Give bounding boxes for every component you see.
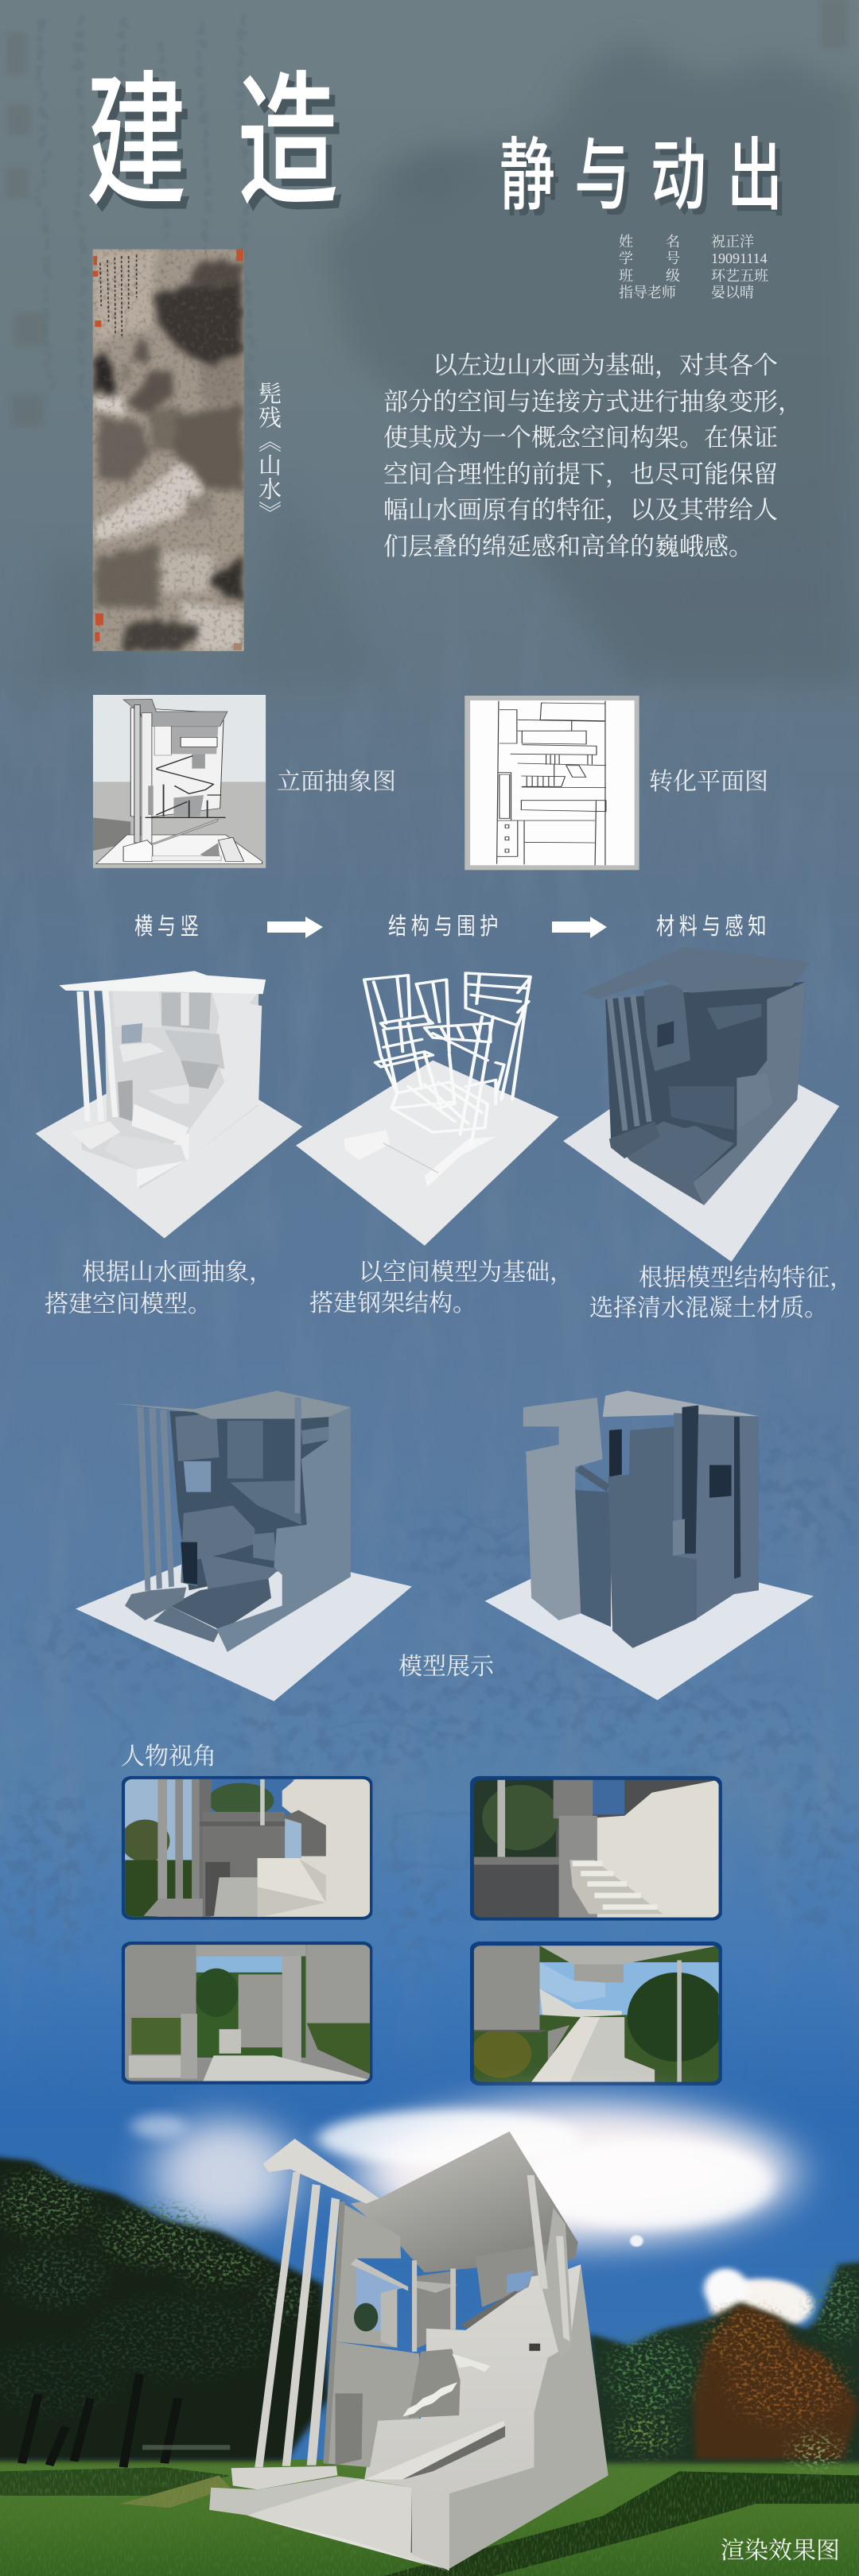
render scene: trees on the right xyxy=(589,2260,859,2469)
building: ramp xyxy=(364,2421,505,2480)
caption step 3: 选择清水混凝土材质。 xyxy=(589,1295,828,1321)
caption step 3: 根据模型结构特征， xyxy=(639,1265,853,1291)
step heading 2: 结构与围护 xyxy=(388,914,503,940)
model step 1: white space model xyxy=(36,971,302,1238)
painting: ink brush texture xyxy=(93,250,244,651)
description paragraph: 使其成为一个概念空间构架。在保证 xyxy=(383,424,778,452)
building: stair recess xyxy=(408,2349,461,2418)
building: stepped main mass xyxy=(364,2264,608,2569)
render scene: ground grass xyxy=(0,2459,859,2576)
subtitle: 动 xyxy=(651,133,706,220)
arrow 2 xyxy=(552,917,607,938)
painting: mountain masses xyxy=(94,258,244,651)
label: first person views: 人物视角 xyxy=(121,1744,216,1770)
painting: Kuncan landscape scroll xyxy=(93,250,244,651)
background faint seals xyxy=(6,0,848,428)
model view B: back xyxy=(485,1391,814,1700)
arrow 1 xyxy=(267,917,323,938)
building: forecourt floor xyxy=(247,2480,444,2569)
caption step 1: 搭建空间模型。 xyxy=(45,1291,212,1317)
painting: pale mist and paths xyxy=(93,250,244,651)
painting caption vertical: 髡残《山水》 xyxy=(255,382,281,525)
plan drawing xyxy=(464,696,639,870)
student information block: 学 xyxy=(619,250,633,266)
building: tall columns xyxy=(255,2172,569,2467)
main title xyxy=(86,61,342,223)
background mottled plaster texture xyxy=(0,517,859,2107)
subtitle: 静 xyxy=(499,133,555,220)
student information block: 祝正洋 xyxy=(711,234,754,250)
subtitle: 出 xyxy=(727,133,783,220)
description paragraph: 们层叠的绵延感和高耸的巍峨感。 xyxy=(383,533,753,560)
title: zao: 造 xyxy=(237,61,338,223)
painting: red seals xyxy=(93,250,243,642)
description paragraph: 以左边山水画为基础，对其各个 xyxy=(433,351,778,379)
description paragraph: 部分的空间与连接方式进行抽象变形， xyxy=(383,388,803,415)
caption step 2: 以空间模型为基础， xyxy=(359,1259,573,1286)
model view A: front xyxy=(76,1391,412,1701)
render scene: concrete building xyxy=(209,2132,608,2570)
painting: calligraphy inscription xyxy=(100,254,137,338)
caption step 3 xyxy=(589,1265,853,1321)
background ink tree foliage xyxy=(0,1423,859,1972)
student information block: 姓 xyxy=(619,234,633,250)
label: model display: 模型展示 xyxy=(398,1654,494,1680)
background ink pavilion lines xyxy=(33,1506,723,1948)
first person view 4 xyxy=(470,1942,726,2085)
caption step 2: 搭建钢架结构。 xyxy=(309,1290,476,1317)
title: jian: 建 xyxy=(86,61,187,223)
label: plan drawing: 转化平面图 xyxy=(649,769,768,795)
subtitle xyxy=(499,133,783,220)
caption step 2 xyxy=(309,1259,573,1317)
subtitle: 与 xyxy=(574,133,630,220)
model step 2: steel frame model xyxy=(296,973,559,1246)
model step 2: frame bars xyxy=(364,973,531,1146)
elevation abstract drawing xyxy=(93,695,266,868)
step heading 1: 横与竖 xyxy=(134,914,203,940)
building: roof top slab xyxy=(263,2139,379,2204)
step heading 3: 材料与感知 xyxy=(656,914,771,940)
building: roof underside xyxy=(351,2132,578,2272)
student information block: 19091114 xyxy=(711,250,768,266)
caption step 1 xyxy=(45,1259,273,1317)
render scene: trees on the left xyxy=(0,2155,328,2467)
label: elevation drawing: 立面抽象图 xyxy=(277,769,396,795)
building: central frame xyxy=(414,2271,455,2349)
caption step 1: 根据山水画抽象， xyxy=(82,1259,273,1286)
model view A: columns xyxy=(137,1398,301,1591)
student information block: 级 xyxy=(666,268,680,284)
background calligraphy columns xyxy=(38,13,252,419)
description paragraph: 幅山水画原有的特征，以及其带给人 xyxy=(383,496,778,524)
student information block: 号 xyxy=(666,250,680,266)
building: plinth steps xyxy=(231,2466,337,2489)
student information block: 环艺五班 xyxy=(711,268,768,284)
building: lower left wall and door xyxy=(323,2341,419,2467)
student information block: 名 xyxy=(666,234,680,250)
description paragraph: 空间合理性的前提下，也尽可能保留 xyxy=(383,460,778,488)
student information block: 班 xyxy=(619,268,633,284)
student information block: 晏以晴 xyxy=(711,285,754,301)
student information block xyxy=(619,234,768,301)
background ink mountains xyxy=(33,39,859,684)
render scene: clouds in sky xyxy=(131,2102,814,2331)
first person view 2 xyxy=(470,1776,722,1921)
model step 3: concrete material model xyxy=(563,947,839,1262)
student information block: 指导老师 xyxy=(619,285,676,301)
model step 1: slender columns xyxy=(76,990,118,1121)
first person view 3 xyxy=(122,1942,372,2085)
building: upper left wall with window xyxy=(336,2202,408,2348)
label: render: 渲染效果图 xyxy=(721,2538,840,2564)
model step 3: columns xyxy=(607,994,652,1131)
description paragraph xyxy=(383,351,803,560)
first person view 1 xyxy=(121,1776,372,1920)
